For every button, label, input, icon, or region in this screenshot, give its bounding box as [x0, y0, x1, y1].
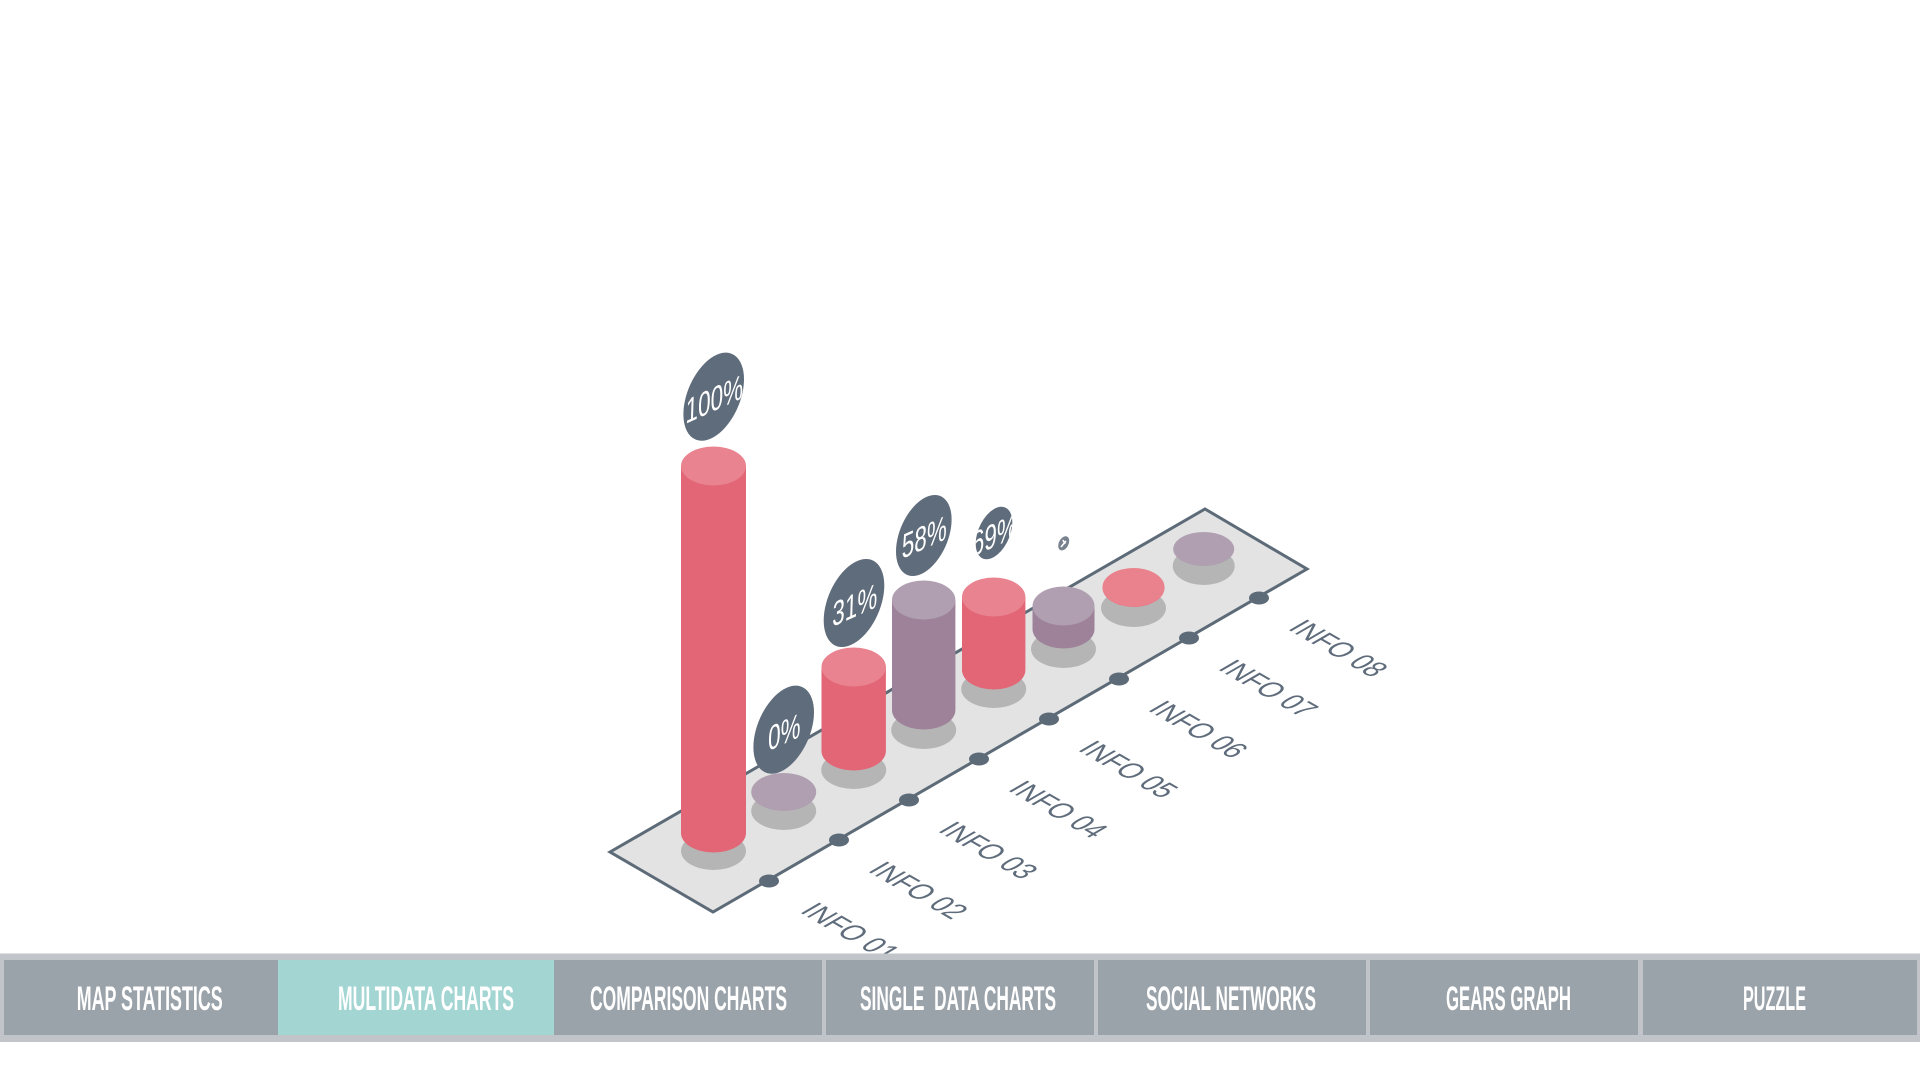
tab: gears graph: GEARS GRAPH [1446, 980, 1571, 1018]
tab: map statistics [4, 960, 278, 1035]
tab: single data charts: SINGLE DATA CHARTS [860, 980, 1056, 1018]
label: info 04: INFO 04 [1000, 777, 1115, 843]
bar: info 07 [1102, 568, 1164, 607]
axis labels [792, 616, 1395, 965]
bar shadows [681, 547, 1235, 870]
tab: gears graph [1370, 960, 1638, 1035]
tab: puzzle: PUZZLE [1743, 980, 1806, 1018]
bubble: 0%: 0% [767, 707, 801, 759]
bar: info 05 [962, 578, 1025, 690]
bar: info 06 [1032, 586, 1094, 649]
tab: multidata charts (active) [278, 960, 554, 1035]
label: info 08: INFO 08 [1280, 616, 1395, 682]
bar: info 08 [1173, 532, 1234, 566]
bubble: info 06 just appearing [1058, 534, 1069, 552]
label: info 06: INFO 06 [1140, 697, 1255, 763]
tab: social networks [1098, 960, 1366, 1035]
label: info 07: INFO 07 [1210, 656, 1325, 722]
label: info 05: INFO 05 [1070, 737, 1185, 803]
bubble: 58%: 58% [901, 509, 947, 567]
bar: info 01 [681, 446, 746, 852]
tab: single data charts [826, 960, 1094, 1035]
label: info 02: INFO 02 [860, 858, 975, 924]
navigation bar [0, 954, 1920, 1042]
axis tick dots [759, 592, 1269, 888]
infographic canvas [0, 352, 1920, 1042]
bar: info 02 [751, 773, 816, 811]
bubble: 31% [824, 545, 884, 661]
label: info 01: INFO 01 [792, 899, 907, 965]
bubble: 69%: 69% [971, 507, 1017, 565]
bar: info 04 [892, 580, 955, 729]
tab: puzzle [1643, 960, 1917, 1035]
isometric bar chart [610, 339, 1395, 965]
bubble: 58% [896, 482, 952, 589]
bubble: 100%: 100% [685, 368, 744, 432]
tab: map statistics: MAP STATISTICS [77, 980, 223, 1018]
label: info 03: INFO 03 [930, 818, 1045, 884]
tab: comparison charts [554, 960, 822, 1035]
bubble: 100% [683, 339, 744, 455]
tab: comparison charts: COMPARISON CHARTS [590, 980, 787, 1018]
tab: social networks: SOCIAL NETWORKS [1146, 980, 1316, 1018]
platform [610, 509, 1307, 912]
tab: multidata charts (active): MULTIDATA CHARTS [338, 980, 514, 1018]
bar: info 03 [822, 648, 886, 770]
bubble: 31%: 31% [832, 577, 878, 635]
bubble: 0% [753, 672, 814, 788]
